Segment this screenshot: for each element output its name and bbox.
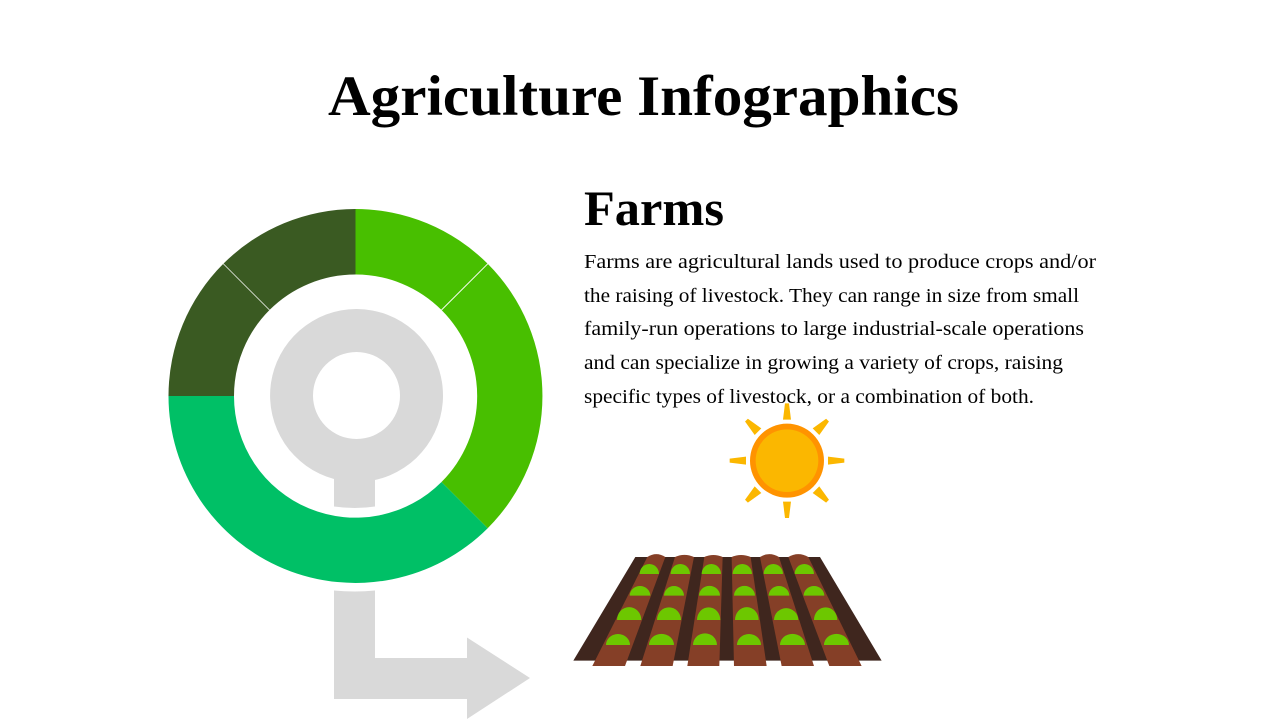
furrow strips bbox=[592, 554, 862, 666]
text block: farms description: family-run operations to large industrial-scale operations bbox=[584, 318, 1084, 340]
crop plants bbox=[606, 564, 849, 645]
arrow: grey elbow arrow bbox=[334, 590, 530, 719]
soil base bbox=[573, 557, 882, 661]
text block: farms description bbox=[584, 251, 1096, 408]
text block: farms description: the raising of livestock. They can range in size from small bbox=[584, 285, 1079, 307]
title: Agriculture Infographics bbox=[328, 65, 959, 128]
donut segment: light green upper right bbox=[356, 209, 488, 310]
donut segment: teal green bottom bbox=[168, 396, 488, 583]
icon: crop field bbox=[573, 554, 882, 666]
donut chart bbox=[168, 209, 542, 583]
donut segment: dark green upper left bbox=[223, 209, 356, 310]
text block: farms description: Farms are agricultural lands used to produce crops and/or bbox=[584, 251, 1096, 273]
icon: grey ring with stem bbox=[270, 309, 443, 508]
text block: farms description: and can specialize in growing a variety of crops, raising bbox=[584, 352, 1063, 374]
heading: Farms: Farms bbox=[584, 180, 724, 236]
donut segment: dark green left bbox=[168, 264, 270, 396]
text block: farms description: specific types of livestock, or a combination of both. bbox=[584, 386, 1034, 408]
donut segment: light green right bbox=[442, 264, 542, 528]
icon: sun bbox=[730, 403, 844, 518]
